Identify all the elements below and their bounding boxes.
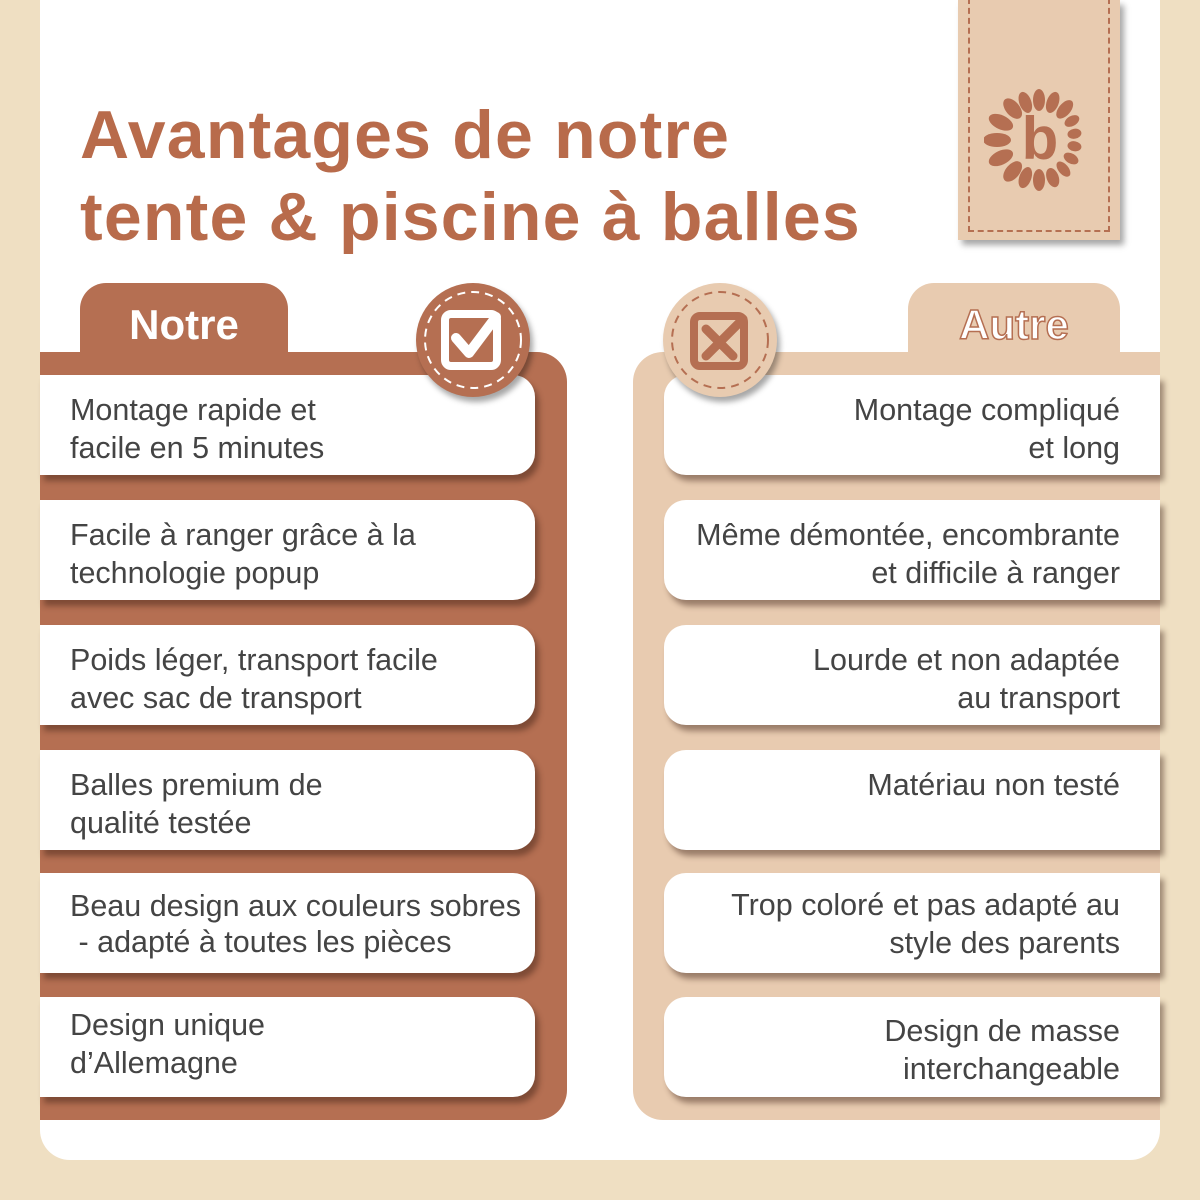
text: - adapté à toutes les pièces [78, 925, 452, 959]
tab: Notre: Notre [129, 301, 239, 348]
icon: check [416, 283, 530, 397]
text: qualité testée [70, 806, 251, 840]
text: Beau design aux couleurs sobres [70, 889, 521, 923]
text: Trop coloré et pas adapté au [731, 888, 1120, 922]
icon: sun logo [984, 89, 1082, 191]
text: et long [1028, 431, 1120, 465]
text: style des parents [889, 926, 1120, 960]
text: Même démontée, encombrante [696, 518, 1120, 552]
panel: Notre [40, 352, 567, 1120]
text: technologie popup [70, 556, 319, 590]
text: Matériau non testé [867, 768, 1120, 802]
title: tente & piscine à balles [80, 179, 861, 255]
icon: sun logo: b [1022, 105, 1058, 172]
text: d’Allemagne [70, 1046, 238, 1080]
text: avec sac de transport [70, 681, 362, 715]
text: Balles premium de [70, 768, 323, 802]
panel: Autre [633, 352, 1160, 1120]
text: Poids léger, transport facile [70, 643, 438, 677]
text: Montage rapide et [70, 393, 316, 427]
logo tag [958, 0, 1120, 240]
text: au transport [957, 681, 1120, 715]
text: Montage compliqué [854, 393, 1120, 427]
tab: Autre [908, 283, 1120, 363]
tab: Autre: Autre [959, 301, 1069, 348]
text: interchangeable [903, 1052, 1120, 1086]
text: Lourde et non adaptée [813, 643, 1120, 677]
text: Design de masse [884, 1014, 1120, 1048]
text: Design unique [70, 1008, 265, 1042]
text: Facile à ranger grâce à la [70, 518, 416, 552]
list: Notre items [40, 375, 542, 1106]
tab: Notre [80, 283, 288, 363]
icon: cross [663, 283, 777, 397]
text: facile en 5 minutes [70, 431, 324, 465]
list: Autre items [664, 375, 1168, 1106]
title [80, 97, 861, 255]
title: Avantages de notre [80, 97, 730, 173]
text: et difficile à ranger [871, 556, 1120, 590]
